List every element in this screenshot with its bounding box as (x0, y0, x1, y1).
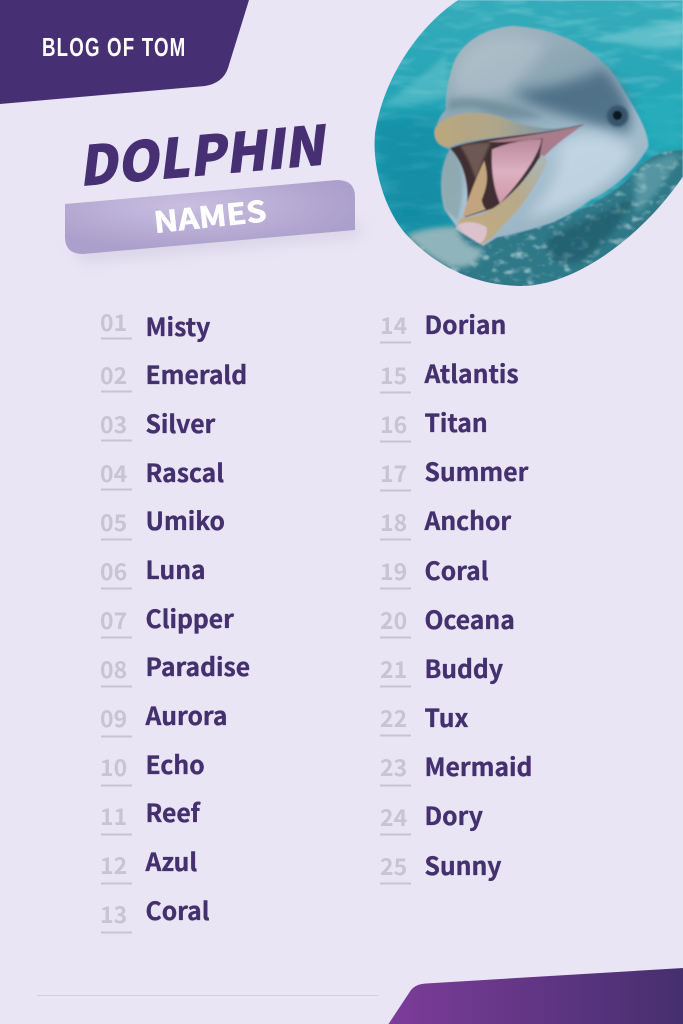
name 08 (100, 648, 250, 686)
brow shade (448, 99, 543, 118)
names column 2 (380, 306, 532, 884)
name 19 (380, 552, 489, 588)
name 13: Coral (146, 892, 210, 928)
name 23: Mermaid (424, 748, 532, 784)
name 12: Azul (144, 843, 197, 879)
water (374, 0, 683, 237)
name 03 (100, 405, 216, 441)
name 19: Coral (424, 552, 489, 588)
names column 1 (100, 304, 250, 932)
name 20: Oceana (424, 601, 515, 637)
name 13 (100, 892, 210, 932)
name 04: Rascal (146, 454, 224, 490)
eye band (513, 68, 631, 133)
name 19: 19 (380, 553, 407, 587)
name 07: 07 (100, 602, 127, 636)
name 17 (380, 453, 529, 490)
name 16 (380, 404, 488, 442)
footer rule (37, 994, 378, 996)
name 13: 13 (100, 896, 127, 930)
name 09: Aurora (144, 697, 228, 733)
pink gum strip (488, 124, 582, 160)
name 24 (380, 797, 483, 834)
name 10: 10 (100, 749, 127, 783)
name 07 (100, 600, 234, 638)
dolphin body (436, 26, 648, 246)
name 18: 18 (380, 504, 407, 538)
name 22: 22 (380, 700, 407, 734)
name 15 (380, 355, 519, 392)
name 10 (100, 746, 205, 786)
name 20: 20 (380, 602, 407, 636)
name 21: 21 (380, 651, 407, 685)
name 21 (380, 650, 503, 686)
name 11 (100, 794, 201, 834)
name 15: 15 (380, 357, 407, 391)
name 05 (100, 502, 225, 540)
footer banner (388, 968, 683, 1024)
name 06: Luna (146, 551, 206, 587)
name 15: Atlantis (424, 355, 519, 391)
name 21: Buddy (424, 650, 503, 686)
name 07: Clipper (146, 600, 234, 636)
name 18: Anchor (424, 502, 511, 538)
name 23 (380, 748, 532, 786)
name 12: 12 (100, 847, 127, 881)
brand name: BLOG OF TOM (42, 32, 185, 62)
eye (607, 105, 628, 127)
subtitle: names: NAMES (152, 188, 268, 242)
name 11: 11 (100, 798, 127, 832)
name 20 (380, 601, 515, 638)
name 12 (100, 843, 197, 884)
name 08: Paradise (146, 648, 250, 684)
upper jaw (434, 113, 585, 147)
name 24: 24 (380, 799, 407, 833)
name 11: Reef (146, 794, 201, 830)
name 09: 09 (100, 700, 127, 734)
inner left mouth (460, 143, 491, 180)
name 23: 23 (380, 749, 407, 783)
name 04 (100, 454, 224, 490)
name 08: 08 (100, 651, 127, 685)
brand banner (0, 0, 249, 104)
name 02 (100, 356, 247, 392)
name 01 (100, 304, 210, 344)
name 24: Dory (424, 797, 483, 833)
name 04: 04 (100, 455, 127, 489)
lower jaw (457, 155, 547, 245)
name 02: Emerald (146, 356, 247, 392)
name 03: Silver (146, 405, 216, 441)
lower jaw tip (456, 222, 487, 246)
name 17: 17 (380, 455, 407, 489)
name 02: 02 (100, 357, 127, 391)
name 22 (380, 699, 468, 736)
name 06: 06 (100, 553, 127, 587)
name 01: Misty (146, 308, 210, 344)
name 14 (380, 306, 506, 342)
dolphin photo illustration (370, 0, 683, 295)
name 01: 01 (100, 304, 127, 338)
name 25 (380, 847, 501, 884)
name 25: Sunny (424, 847, 501, 883)
left lip skin (441, 150, 462, 220)
name 16: 16 (380, 406, 407, 440)
name 06 (100, 551, 206, 588)
title: dolphin: DOLPHIN (78, 101, 333, 202)
tongue (492, 139, 542, 203)
name 03: 03 (100, 406, 127, 440)
name 14: Dorian (424, 306, 506, 342)
name 17: Summer (424, 453, 529, 489)
name 14: 14 (380, 307, 407, 341)
cheek highlight (523, 135, 633, 220)
lower teeth strip (463, 161, 487, 217)
name 18 (380, 502, 511, 540)
melon highlight (455, 37, 547, 96)
name 05: 05 (100, 504, 127, 538)
name 09 (100, 697, 228, 736)
name 22: Tux (424, 699, 468, 735)
splashing water (403, 147, 683, 295)
name 25: 25 (380, 848, 407, 882)
name 05: Umiko (146, 502, 225, 538)
mouth interior (450, 125, 584, 217)
name 16: Titan (424, 404, 488, 440)
subtitle ribbon (65, 180, 360, 262)
name 10: Echo (146, 746, 205, 782)
